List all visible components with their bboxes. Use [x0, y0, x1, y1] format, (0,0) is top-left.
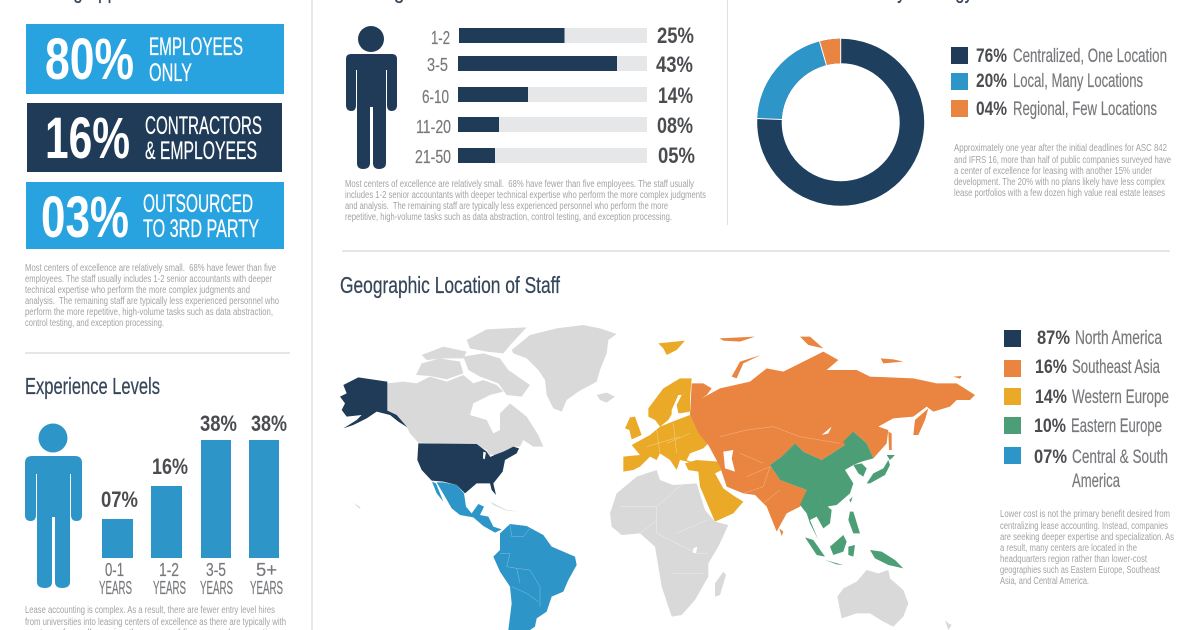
chart: staff size bars — [346, 23, 695, 169]
stat box: 03% outsourced: TO 3RD PARTY — [143, 215, 259, 243]
region: Alaska — [340, 377, 407, 428]
region: Middle East — [685, 460, 743, 522]
percentage values: 14% — [658, 83, 693, 108]
text block: staffing approach note: perform the more repetitive, high-volume tasks such as data abstraction, — [25, 307, 273, 318]
region: Russia and South Asia — [690, 352, 975, 532]
legend: world map: North America — [1075, 328, 1162, 349]
bar values: 16% — [152, 454, 188, 479]
heading: geographic location: Geographic Location of Staff — [340, 272, 560, 298]
stat box: 80% employees only — [26, 24, 284, 94]
map: europe, africa, asia, oceania — [610, 337, 975, 630]
bar values: 38% — [251, 411, 287, 436]
bar values: 07% — [101, 487, 138, 512]
legend: donut: Local, Many Locations — [1013, 71, 1143, 92]
range labels — [415, 28, 451, 167]
heading: experience levels: Experience Levels — [25, 373, 160, 399]
stat box: 16% contractors and employees: CONTRACTORS — [145, 112, 262, 140]
text block: map note: a result, many centers are located in the — [1000, 543, 1137, 554]
bar values — [101, 411, 287, 512]
bar fills — [458, 28, 617, 163]
text block: staffing approach note: technical expertise who perform the more complex judgments and — [25, 285, 250, 296]
range labels: 11-20 — [416, 117, 451, 137]
region: Australia — [837, 570, 908, 627]
legend: donut: 04% — [976, 99, 1007, 120]
range labels: 1-2 — [431, 28, 450, 48]
bar labels — [99, 560, 283, 598]
map: americas — [340, 325, 642, 630]
text block: staff size note — [345, 179, 706, 223]
text block: experience note — [25, 605, 286, 630]
legend: world map: 14% — [1035, 387, 1067, 408]
bars — [102, 440, 279, 558]
region: South America — [493, 524, 577, 630]
range labels: 6-10 — [422, 87, 449, 107]
legend: donut — [951, 46, 1167, 120]
stat box: 80% employees only: 80% — [45, 27, 134, 92]
text block: staff size note: includes 1-2 senior accountants with deeper technical expertise who perform the more complex judgments — [345, 190, 706, 201]
bar labels: YEARS — [99, 578, 132, 598]
text block: staffing approach note: analysis. The remaining staff are typically less experienced personnel who — [25, 296, 279, 307]
text block: experience note: from universities into leasing centers of excellence as there are typically with — [25, 617, 286, 628]
panel: staffing approach boxes — [26, 24, 284, 250]
legend: world map: Eastern Europe — [1071, 416, 1162, 437]
percentage values — [656, 23, 695, 168]
text block: staffing approach note: control testing, and exception processing. — [25, 318, 164, 329]
legend: world map: 87% — [1037, 328, 1070, 349]
stat box: 80% employees only: EMPLOYEES — [149, 33, 243, 61]
region: Mexico and Central America — [432, 482, 502, 533]
region: contiguous USA — [417, 443, 519, 495]
stat box: 80% employees only: ONLY — [149, 59, 192, 87]
chart: experience levels — [25, 411, 287, 598]
text block: map note: Asia, and Central America. — [1000, 576, 1089, 587]
legend: donut: 20% — [976, 71, 1007, 92]
icon: person dark — [346, 26, 397, 169]
region: Europe — [623, 415, 708, 472]
bar labels: 1-2 — [159, 560, 179, 580]
legend: world map: Southeast Asia — [1072, 357, 1160, 378]
bar labels: YEARS — [200, 578, 233, 598]
legend: world map — [1004, 328, 1169, 492]
text block: experience note: Lease accounting is complex. As a result, there are fewer entry level hires — [25, 605, 275, 616]
legend: donut: 76% — [976, 46, 1007, 67]
text block: map note — [1000, 509, 1174, 587]
icon: person blue — [25, 424, 82, 588]
text block: staffing approach note: employees. The staff usually includes 1-2 senior accountants with deeper — [25, 274, 273, 285]
percentage values: 08% — [657, 113, 693, 138]
bar labels: YEARS — [250, 578, 283, 598]
bar labels: 5+ — [256, 560, 277, 580]
stat box: 03% outsourced — [26, 182, 284, 250]
stat box: 16% contractors and employees — [27, 103, 282, 172]
stat box: 16% contractors and employees: 16% — [45, 106, 130, 171]
legend: world map: 07% — [1034, 447, 1067, 468]
text block: map note: headquarters region rather than lower-cost — [1000, 554, 1147, 565]
legend: world map: America — [1072, 471, 1120, 492]
text block: staff size note: repetitive, high-volume tasks such as data abstraction, control testing, and exception processing. — [345, 212, 672, 223]
text block: staffing approach note — [25, 263, 279, 329]
bar values: 38% — [200, 411, 237, 436]
chart: donut — [757, 38, 912, 194]
region: China and Southeast Asia — [770, 432, 903, 568]
chart: world map — [340, 325, 975, 630]
range labels: 21-50 — [415, 147, 451, 167]
text block: staff size note: and analysis. The remaining staff are typically less experienced personnel who perform the more — [345, 201, 668, 212]
stat box: 16% contractors and employees: & EMPLOYEES — [145, 137, 257, 165]
text block: staffing approach note: Most centers of excellence are relatively small. 68% have fewer than five — [25, 263, 276, 274]
percentage values: 43% — [656, 52, 693, 77]
percentage values: 25% — [657, 23, 694, 48]
range labels: 3-5 — [427, 55, 448, 75]
stat box: 03% outsourced: OUTSOURCED — [143, 190, 253, 218]
region: Africa — [610, 470, 728, 617]
bar labels: 0-1 — [105, 560, 124, 580]
bar labels: YEARS — [153, 578, 186, 598]
legend: world map: 16% — [1035, 357, 1067, 378]
text block: donut note — [954, 143, 1171, 199]
stat box: 03% outsourced: 03% — [41, 185, 129, 250]
percentage values: 05% — [658, 143, 695, 168]
text block: staff size note: Most centers of excellence are relatively small. 68% have fewer than five employees. The staff usually — [345, 179, 694, 190]
bar tracks — [459, 28, 647, 163]
legend: world map: 10% — [1034, 416, 1066, 437]
bar labels: 3-5 — [206, 560, 226, 580]
